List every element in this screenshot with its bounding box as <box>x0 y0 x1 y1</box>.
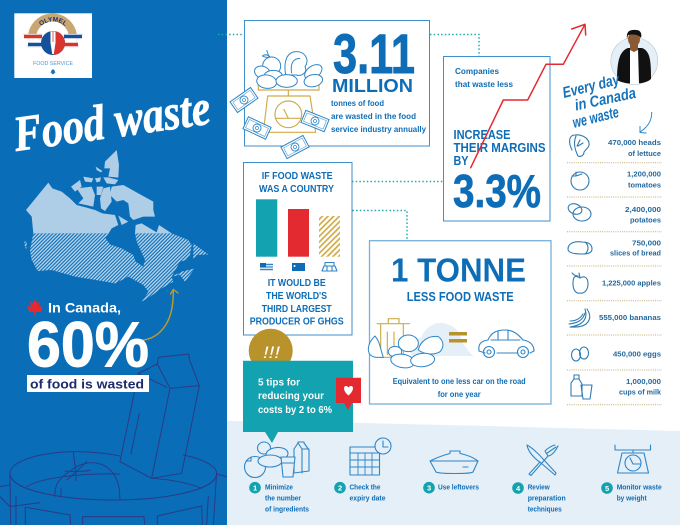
step 1: 1 <box>253 484 257 492</box>
text: tips heading: costs by 2 to 6% <box>258 404 333 416</box>
item: apples: 1,225,000 apples <box>602 279 661 288</box>
text: companies: Companies <box>455 67 500 76</box>
heading: every day in Canada we waste <box>561 71 638 132</box>
item: bananas: 555,000 bananas <box>599 313 661 322</box>
item: potatoes <box>567 202 661 225</box>
step 5: Monitor waste <box>617 482 662 491</box>
item: tomatoes: 1,200,000 <box>627 170 661 179</box>
step 2: Check the <box>350 482 380 491</box>
icon: heart notification <box>336 378 361 410</box>
step 5: by weight <box>617 493 647 502</box>
step 5 <box>601 445 662 502</box>
text: third largest producer: THE WORLD'S <box>266 291 327 302</box>
panel: companies that waste less <box>444 56 550 221</box>
icon: maple leaf <box>28 299 42 316</box>
text: companies <box>455 67 514 89</box>
item: lettuce: 470,000 heads <box>608 138 661 147</box>
map: Canada upper part solid <box>26 150 172 234</box>
label: of food is wasted: of food is wasted <box>30 376 144 391</box>
item: milk: 1,000,000 <box>626 377 661 386</box>
item: lettuce <box>570 135 661 158</box>
map: Canada southern part hatched <box>24 233 208 302</box>
stat: 3.11: 3.11 <box>333 22 415 85</box>
text: increase margins: BY <box>454 154 469 168</box>
illustration: cloud <box>410 323 474 356</box>
text: tonnes of food wasted <box>331 99 427 134</box>
step 2 <box>334 438 391 502</box>
step 3: 3 <box>427 484 431 492</box>
icon: man portrait <box>611 30 658 84</box>
text: tips heading <box>258 377 333 416</box>
text: tonnes of food wasted: are wasted in the food <box>331 112 416 121</box>
step 4: 4 <box>516 484 521 493</box>
icon: equals sign <box>449 332 467 342</box>
text: equivalent: Equivalent to one less car on the road <box>393 377 526 386</box>
item: potatoes: 2,400,000 <box>625 205 661 214</box>
text: companies: that waste less <box>455 80 514 89</box>
text: third largest producer: THIRD LARGEST <box>262 304 332 315</box>
logo <box>14 13 92 78</box>
text: increase margins: THEIR MARGINS <box>454 141 546 155</box>
text: increase margins: INCREASE <box>454 128 510 142</box>
item: bananas <box>569 309 661 327</box>
step 1 <box>244 442 309 513</box>
text: tips heading: reducing your <box>258 390 324 402</box>
item: tomatoes: tomatoes <box>628 180 661 190</box>
step 3 <box>423 451 479 494</box>
stat: 60%: 60% <box>27 309 149 381</box>
text: tonnes of food wasted: tonnes of food <box>331 99 384 108</box>
item: bread <box>568 239 661 258</box>
text: third largest producer: IT WOULD BE <box>268 278 326 289</box>
panel: 3.11 million <box>230 20 430 159</box>
step 2: 2 <box>338 484 342 492</box>
logo: OLYMEL <box>39 16 66 26</box>
text: third largest producer <box>250 278 344 328</box>
text: third largest producer: PRODUCER OF GHGS <box>250 316 344 328</box>
icon: China flag <box>292 263 305 271</box>
stat: 3.3%: 3.3% <box>453 165 541 217</box>
step 1: the number <box>265 493 301 502</box>
step 4: techniques <box>528 504 562 513</box>
item: bread: slices of bread <box>610 249 661 258</box>
arrow: gold curve to map <box>136 290 178 341</box>
panel: tips band background <box>227 421 680 525</box>
heading: every day in Canada we waste: in Canada <box>573 85 638 114</box>
panel: if food waste was a country <box>244 162 352 335</box>
item: apples <box>572 273 661 293</box>
step 4: Review <box>528 482 550 491</box>
callout: 5 tips <box>243 329 361 443</box>
connector: dotted lines <box>218 34 479 241</box>
illustration: trash and food <box>368 319 443 370</box>
step 3: Use leftovers <box>438 482 479 491</box>
arrow: small curved down <box>640 112 652 133</box>
bar chart <box>256 199 340 257</box>
item: eggs <box>572 347 661 361</box>
heading: every day in Canada we waste: we waste <box>571 104 621 132</box>
heading: IF FOOD WASTE <box>262 171 333 182</box>
step 1: of ingredients <box>265 504 309 513</box>
list: daily waste items <box>567 135 662 405</box>
item: tomatoes <box>571 170 661 190</box>
heading <box>259 171 334 195</box>
text: increase margins <box>454 128 546 168</box>
icon: money bills <box>230 88 329 159</box>
icon: covered dish <box>430 451 478 474</box>
icon: tomato potatoes glass milk <box>244 442 309 478</box>
icon: kitchen scale <box>615 445 650 473</box>
stat: 1 TONNE: 1 TONNE <box>391 252 526 289</box>
logo: FOOD SERVICE <box>33 61 73 67</box>
heading: every day in Canada we waste: Every day <box>561 71 622 102</box>
arrow: red rising line <box>471 24 586 168</box>
text: tips heading: 5 tips for <box>258 377 300 389</box>
step 4 <box>512 445 566 513</box>
item: milk <box>571 375 662 399</box>
step 1: Minimize <box>265 482 293 491</box>
illustration: bin with carton and tomato <box>0 354 227 525</box>
text: MILLION: MILLION <box>332 76 413 96</box>
item: milk: cups of milk <box>619 388 662 397</box>
icon: knife and fork <box>527 445 558 476</box>
panel: teal tips box <box>243 361 353 443</box>
step 2: expiry date <box>350 493 386 502</box>
step 5: 5 <box>605 484 609 493</box>
text: equivalent <box>393 377 526 399</box>
step 4: preparation <box>528 493 566 502</box>
icon: calendar with clock <box>350 438 391 475</box>
icon: gold exclamation bubble: !!! <box>263 343 280 362</box>
item: lettuce: of lettuce <box>628 149 661 158</box>
item: bread: 750,000 <box>632 239 661 248</box>
heading: WAS A COUNTRY <box>259 184 334 195</box>
panel: 1 tonne <box>368 241 551 404</box>
text: equivalent: for one year <box>438 390 481 399</box>
icon: scale with food <box>253 50 325 132</box>
item: potatoes: potatoes <box>630 216 661 225</box>
icon: car <box>479 330 534 358</box>
icon: food waste building <box>322 262 337 271</box>
text: tonnes of food wasted: service industry annually <box>331 125 427 134</box>
panel: blue left column <box>0 0 227 525</box>
text: less food waste: LESS FOOD WASTE <box>407 290 514 304</box>
title: Food waste: Food waste <box>9 79 214 162</box>
text: In Canada: In Canada, <box>48 299 121 315</box>
item: eggs: 450,000 eggs <box>613 350 661 359</box>
icon: USA flag <box>260 263 273 271</box>
